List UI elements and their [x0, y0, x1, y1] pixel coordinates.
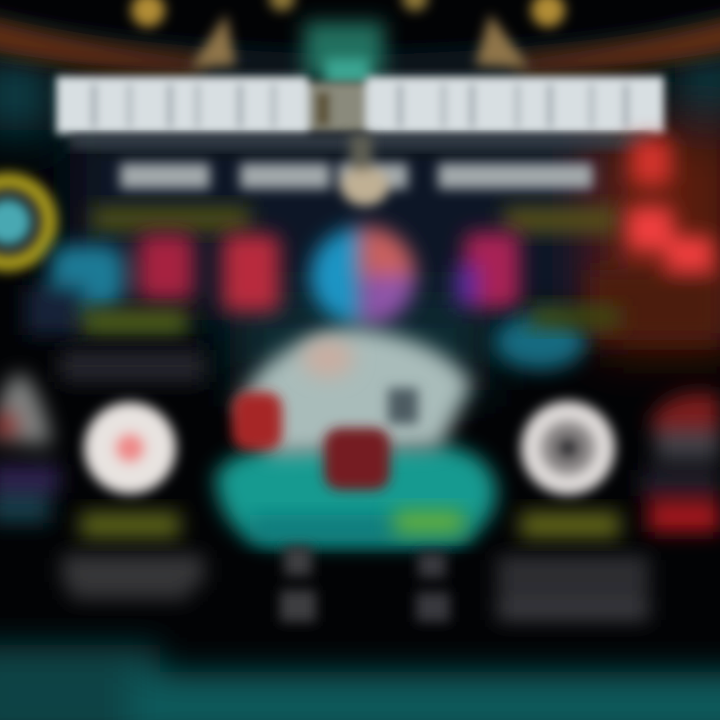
cards	[238, 328, 472, 455]
title block (illegible in reference)	[56, 76, 664, 134]
bottom teal band	[0, 645, 720, 720]
table	[215, 445, 497, 545]
background: navy glow behind the content	[0, 50, 720, 390]
right caption text block (illegible)	[497, 558, 649, 620]
red die left	[232, 392, 282, 450]
left edge illustration	[0, 374, 60, 523]
icon: white target right	[521, 401, 615, 495]
icon: red dice right	[590, 138, 720, 340]
top arch with gold ornaments	[0, 0, 720, 84]
subtitle block (illegible in reference)	[120, 134, 593, 206]
red die centre	[324, 428, 390, 490]
icon: gold ring left	[0, 181, 49, 263]
green table label	[394, 510, 464, 534]
icon: teal globe right	[494, 314, 586, 370]
title underside shadow	[70, 136, 650, 148]
right edge illustration	[640, 393, 720, 532]
right heading bar	[504, 207, 618, 233]
centre-right caption text block (illegible)	[416, 552, 450, 622]
right caption bar	[520, 512, 620, 538]
icon: magenta chip	[455, 232, 520, 308]
centre illustration: poker table, cards and dice	[215, 328, 497, 545]
dark card mark	[388, 388, 418, 424]
left heading bar	[92, 207, 250, 231]
icon row: left chips	[25, 234, 280, 335]
table lower shade	[250, 515, 470, 541]
icon: white target left	[84, 402, 176, 494]
right sublabel bar	[530, 306, 620, 328]
left sublabel bar	[82, 310, 188, 334]
left description text block (illegible)	[60, 350, 204, 382]
left caption bar	[80, 512, 180, 538]
icon: multicolour centre wheel	[310, 224, 418, 328]
left caption text block (illegible)	[62, 556, 204, 598]
pale card mark	[302, 338, 354, 378]
centre-left caption text block (illegible)	[280, 546, 316, 622]
